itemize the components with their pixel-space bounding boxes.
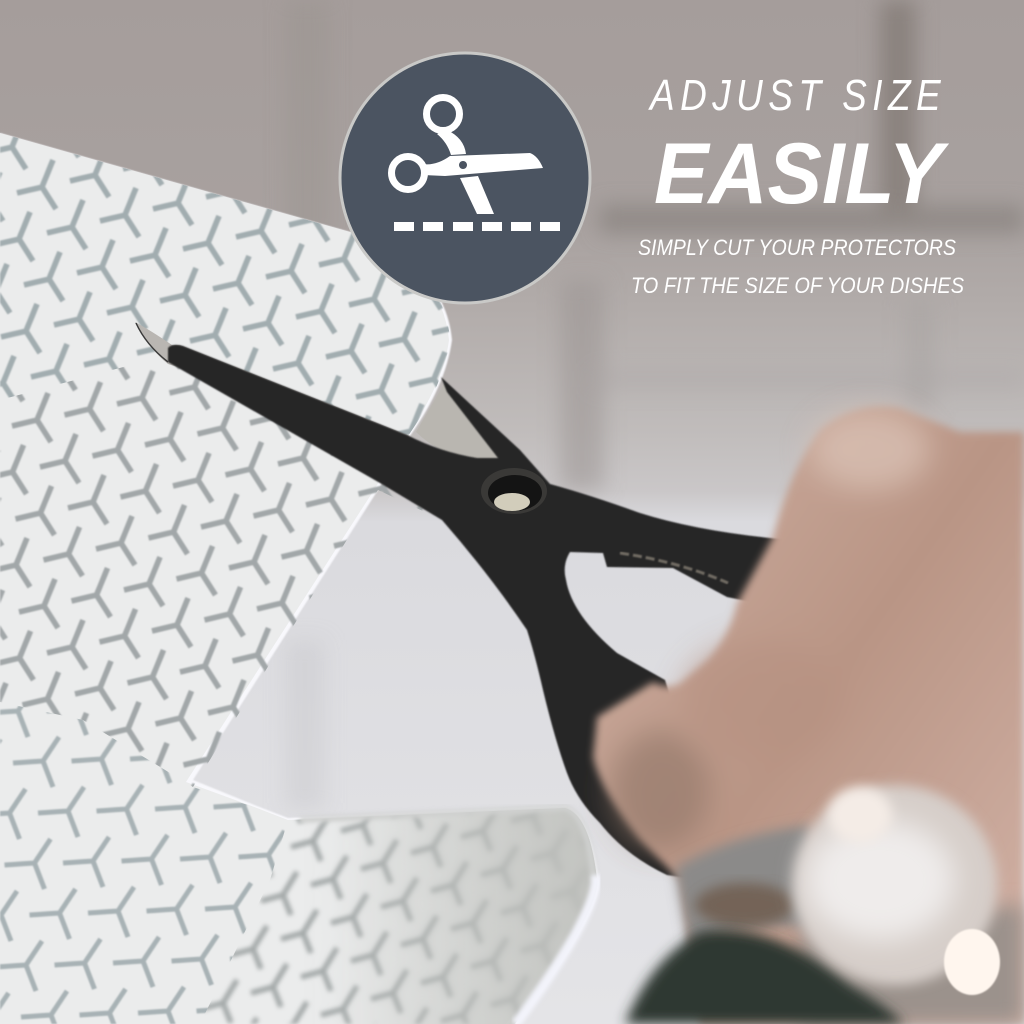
sheet right edge <box>516 875 596 1024</box>
silver blade tip <box>135 322 410 440</box>
Y pattern, out of focus <box>206 809 596 1024</box>
pivot screw <box>481 468 547 514</box>
icon: scissors <box>392 98 543 214</box>
lens flare <box>944 929 1000 995</box>
hand holding scissors <box>593 406 1024 1024</box>
Y pattern, below blade <box>0 366 423 787</box>
lower-right shadow <box>800 905 1024 1024</box>
handle spring detail <box>620 553 728 583</box>
paper under the blade <box>416 384 500 460</box>
icon: dashed cut line <box>394 222 560 231</box>
watch strap <box>675 825 830 950</box>
heading: adjust size: ADJUST SIZE <box>648 70 941 120</box>
soft far edge of lower sheet <box>300 808 594 880</box>
scissors <box>135 322 790 880</box>
round scissors badge <box>340 53 590 303</box>
black handles and blades <box>168 345 790 880</box>
wrist and watch <box>625 785 1024 1024</box>
subtitle line 1: SIMPLY CUT YOUR PROTECTORS <box>638 235 956 260</box>
watch case <box>793 785 997 985</box>
subtitle line 2: TO FIT THE SIZE OF YOUR DISHES <box>631 273 964 298</box>
sheet edge highlight <box>0 133 599 1024</box>
sleeve <box>625 930 905 1024</box>
sheet surface <box>0 133 593 1024</box>
Y pattern, upper area <box>0 136 450 435</box>
blade tip shadow <box>136 323 168 362</box>
heading: easily: EASILY <box>654 126 949 222</box>
paper protector sheet <box>0 132 600 1024</box>
Y pattern, lower sheet <box>0 706 285 1024</box>
